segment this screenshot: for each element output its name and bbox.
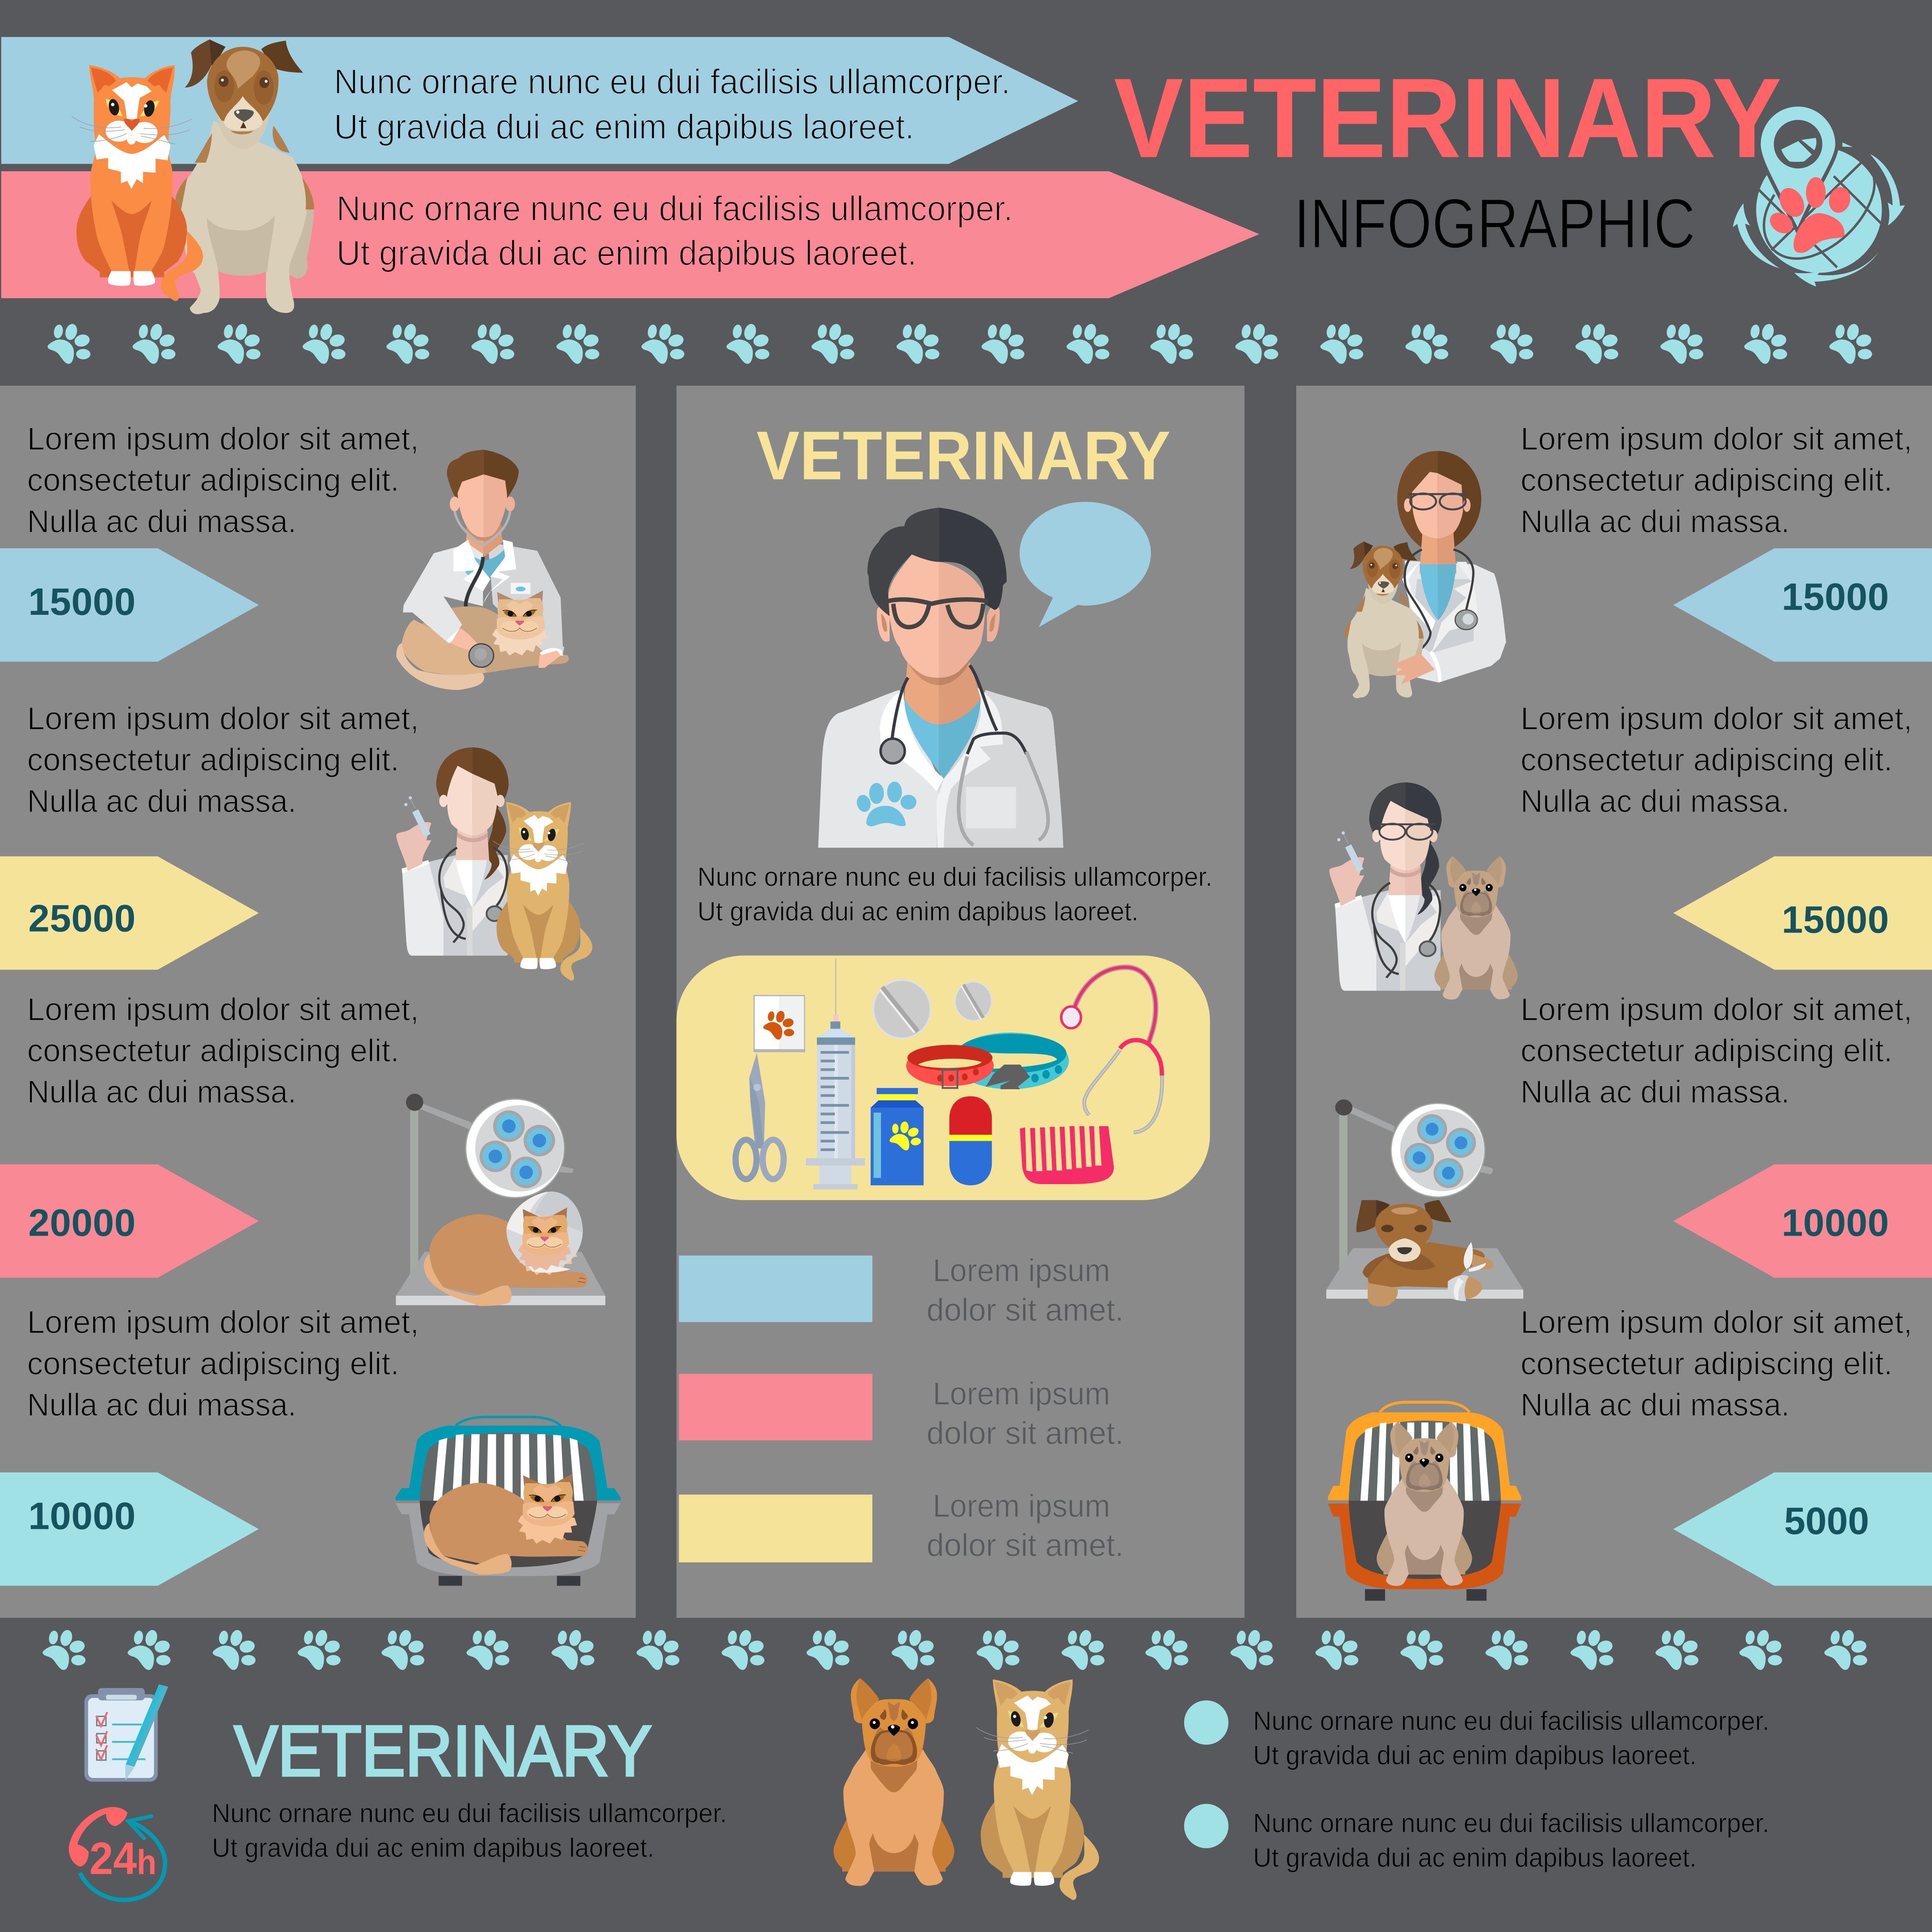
right text block 2: consectetur adipiscing elit. bbox=[1520, 741, 1893, 778]
right text block 4 bbox=[1520, 1304, 1912, 1423]
legend: pink: Lorem ipsum bbox=[933, 1376, 1110, 1412]
illustration: orange cat bbox=[72, 65, 203, 301]
illustration: tan cat bbox=[976, 1680, 1099, 1900]
left text block 2 bbox=[27, 700, 419, 819]
left text block 2: consectetur adipiscing elit. bbox=[27, 741, 399, 778]
arrow: right 10000: 10000 bbox=[1782, 1201, 1889, 1244]
left text block 2: Lorem ipsum dolor sit amet, bbox=[27, 700, 419, 736]
left text block 4: Nulla ac dui massa. bbox=[27, 1387, 296, 1423]
subtitle: infographic: INFOGRAPHIC bbox=[1294, 184, 1695, 263]
arrow: right 5000 bbox=[1673, 1473, 1932, 1586]
center description text: Ut gravida dui ac enim dapibus laoreet. bbox=[697, 897, 1139, 927]
panel: yellow tools tray bbox=[677, 956, 1210, 1200]
panel: center bbox=[677, 386, 1245, 1618]
paw row: top bbox=[48, 322, 1873, 364]
right text block 3: consectetur adipiscing elit. bbox=[1520, 1032, 1893, 1068]
right text block 1: consectetur adipiscing elit. bbox=[1520, 462, 1893, 498]
arrow: right 15000 blue bbox=[1673, 548, 1932, 662]
right text block 2: Lorem ipsum dolor sit amet, bbox=[1520, 700, 1912, 736]
bullet item 1 bbox=[1184, 1700, 1769, 1771]
left text block 2: Nulla ac dui massa. bbox=[27, 783, 296, 819]
heading: center veterinary: VETERINARY bbox=[756, 417, 1170, 494]
arrow: right 5000: 5000 bbox=[1784, 1499, 1869, 1542]
legend: blue: dolor sit amet. bbox=[927, 1292, 1124, 1328]
icon: pink comb bbox=[1020, 1126, 1114, 1184]
banner: pink: Ut gravida dui ac enim dapibus laoreet. bbox=[336, 234, 917, 273]
speech bubble bbox=[1020, 502, 1151, 627]
icon: blue bottle bbox=[871, 1088, 924, 1185]
icon: stethoscope bbox=[1061, 967, 1162, 1132]
illustration: vet with stethoscope and cat bbox=[396, 450, 569, 690]
bottom description text bbox=[212, 1799, 727, 1863]
legend: yellow bbox=[679, 1488, 1124, 1563]
panel: left bbox=[0, 386, 636, 1618]
bullet item 1: Ut gravida dui ac enim dapibus laoreet. bbox=[1253, 1741, 1697, 1771]
icon: 24h phone support bbox=[69, 1807, 165, 1900]
arrow: left 25000: 25000 bbox=[28, 897, 136, 940]
arrow: left 10000 bbox=[0, 1473, 259, 1586]
left text block 4 bbox=[27, 1304, 419, 1423]
bottom description text: Ut gravida dui ac enim dapibus laoreet. bbox=[212, 1833, 654, 1863]
icon: globe with location pin and paw bbox=[1733, 105, 1905, 287]
arrow: right 10000 bbox=[1673, 1164, 1932, 1278]
left text block 3: Nulla ac dui massa. bbox=[27, 1074, 296, 1110]
illustration: french bulldog in orange carrier bbox=[1328, 1402, 1521, 1601]
bullet item 2 bbox=[1184, 1804, 1769, 1873]
right text block 1: Lorem ipsum dolor sit amet, bbox=[1520, 421, 1912, 457]
right text block 3 bbox=[1520, 991, 1912, 1110]
right text block 4: consectetur adipiscing elit. bbox=[1520, 1345, 1893, 1381]
left text block 4: consectetur adipiscing elit. bbox=[27, 1345, 399, 1381]
left text block 4: Lorem ipsum dolor sit amet, bbox=[27, 1304, 419, 1340]
banner: blue bbox=[1, 37, 1078, 164]
illustration: central vet bbox=[818, 507, 1063, 848]
icon: scissors bbox=[735, 1053, 784, 1179]
panel: right bbox=[1296, 386, 1932, 1618]
illustration: female vet with glasses and dog bbox=[1344, 451, 1506, 698]
bottom description text: Nunc ornare nunc eu dui facilisis ullamcorper. bbox=[212, 1799, 727, 1829]
left text block 3: Lorem ipsum dolor sit amet, bbox=[27, 991, 419, 1027]
arrow: left 20000 bbox=[0, 1164, 259, 1278]
icon: paw card bbox=[753, 995, 805, 1052]
legend: yellow: Lorem ipsum bbox=[933, 1488, 1110, 1524]
arrow: left 25000 bbox=[0, 857, 259, 970]
banner: blue: Nunc ornare nunc eu dui facilisis ullamcorper. bbox=[334, 62, 1010, 101]
illustration: female vet with syringe and cat bbox=[396, 747, 592, 981]
bullet item 2: Nunc ornare nunc eu dui facilisis ullamcorper. bbox=[1253, 1809, 1769, 1838]
left text block 1: Lorem ipsum dolor sit amet, bbox=[27, 421, 419, 457]
bullet item 2: Ut gravida dui ac enim dapibus laoreet. bbox=[1253, 1843, 1697, 1873]
left text block 3: consectetur adipiscing elit. bbox=[27, 1032, 399, 1068]
icon: collars bbox=[906, 1033, 1069, 1089]
right text block 1: Nulla ac dui massa. bbox=[1520, 503, 1790, 539]
right text block 2 bbox=[1520, 700, 1912, 819]
legend: blue: Lorem ipsum bbox=[933, 1252, 1110, 1288]
arrow: left 15000: 15000 bbox=[28, 580, 136, 623]
right text block 2: Nulla ac dui massa. bbox=[1520, 783, 1790, 819]
legend: pink bbox=[679, 1374, 1124, 1451]
arrow: right 15000 blue: 15000 bbox=[1782, 575, 1889, 618]
banner: pink bbox=[1, 171, 1259, 298]
illustration: cat with cone under surgical lamp bbox=[396, 1094, 605, 1306]
paw row: bottom bbox=[43, 1629, 1868, 1670]
icon: 24h phone support: 24h bbox=[89, 1833, 156, 1884]
center description text bbox=[697, 862, 1212, 927]
illustration: jack russell dog bbox=[175, 39, 314, 314]
right text block 1 bbox=[1520, 421, 1912, 539]
legend: pink: dolor sit amet. bbox=[927, 1415, 1124, 1451]
illustration: french bulldog bbox=[833, 1678, 954, 1886]
title: veterinary: VETERINARY bbox=[1114, 55, 1782, 181]
right text block 4: Lorem ipsum dolor sit amet, bbox=[1520, 1304, 1912, 1340]
right text block 3: Lorem ipsum dolor sit amet, bbox=[1520, 991, 1912, 1027]
icon: capsule bbox=[949, 1096, 992, 1185]
banner: blue: Ut gravida dui ac enim dapibus laoreet. bbox=[334, 107, 914, 146]
legend: yellow: dolor sit amet. bbox=[927, 1527, 1124, 1563]
illustration: injured dog under surgical lamp bbox=[1326, 1100, 1523, 1306]
icon: syringe bbox=[806, 959, 865, 1189]
arrow: left 20000: 20000 bbox=[28, 1201, 136, 1244]
arrow: left 10000: 10000 bbox=[28, 1495, 136, 1537]
banner: pink: Nunc ornare nunc eu dui facilisis ullamcorper. bbox=[336, 189, 1013, 228]
right text block 4: Nulla ac dui massa. bbox=[1520, 1387, 1790, 1423]
illustration: cat in teal carrier bbox=[395, 1417, 621, 1586]
right text block 3: Nulla ac dui massa. bbox=[1520, 1074, 1790, 1110]
bullet item 1: Nunc ornare nunc eu dui facilisis ullamcorper. bbox=[1253, 1706, 1769, 1736]
left text block 3 bbox=[27, 991, 419, 1110]
heading: bottom veterinary: VETERINARY bbox=[234, 1711, 652, 1791]
arrow: right 15000 yellow: 15000 bbox=[1782, 898, 1889, 941]
left text block 1: consectetur adipiscing elit. bbox=[27, 462, 399, 498]
icon: tablets bbox=[872, 979, 993, 1039]
icon: clipboard checklist with pencil bbox=[85, 1684, 168, 1782]
arrow: right 15000 yellow bbox=[1673, 857, 1932, 970]
left text block 1 bbox=[27, 421, 419, 539]
legend: blue bbox=[679, 1252, 1124, 1328]
left text block 1: Nulla ac dui massa. bbox=[27, 503, 296, 539]
center description text: Nunc ornare nunc eu dui facilisis ullamcorper. bbox=[697, 862, 1212, 892]
illustration: dark haired vet with syringe and french bulldog bbox=[1329, 782, 1518, 999]
arrow: left 15000 bbox=[0, 548, 259, 662]
